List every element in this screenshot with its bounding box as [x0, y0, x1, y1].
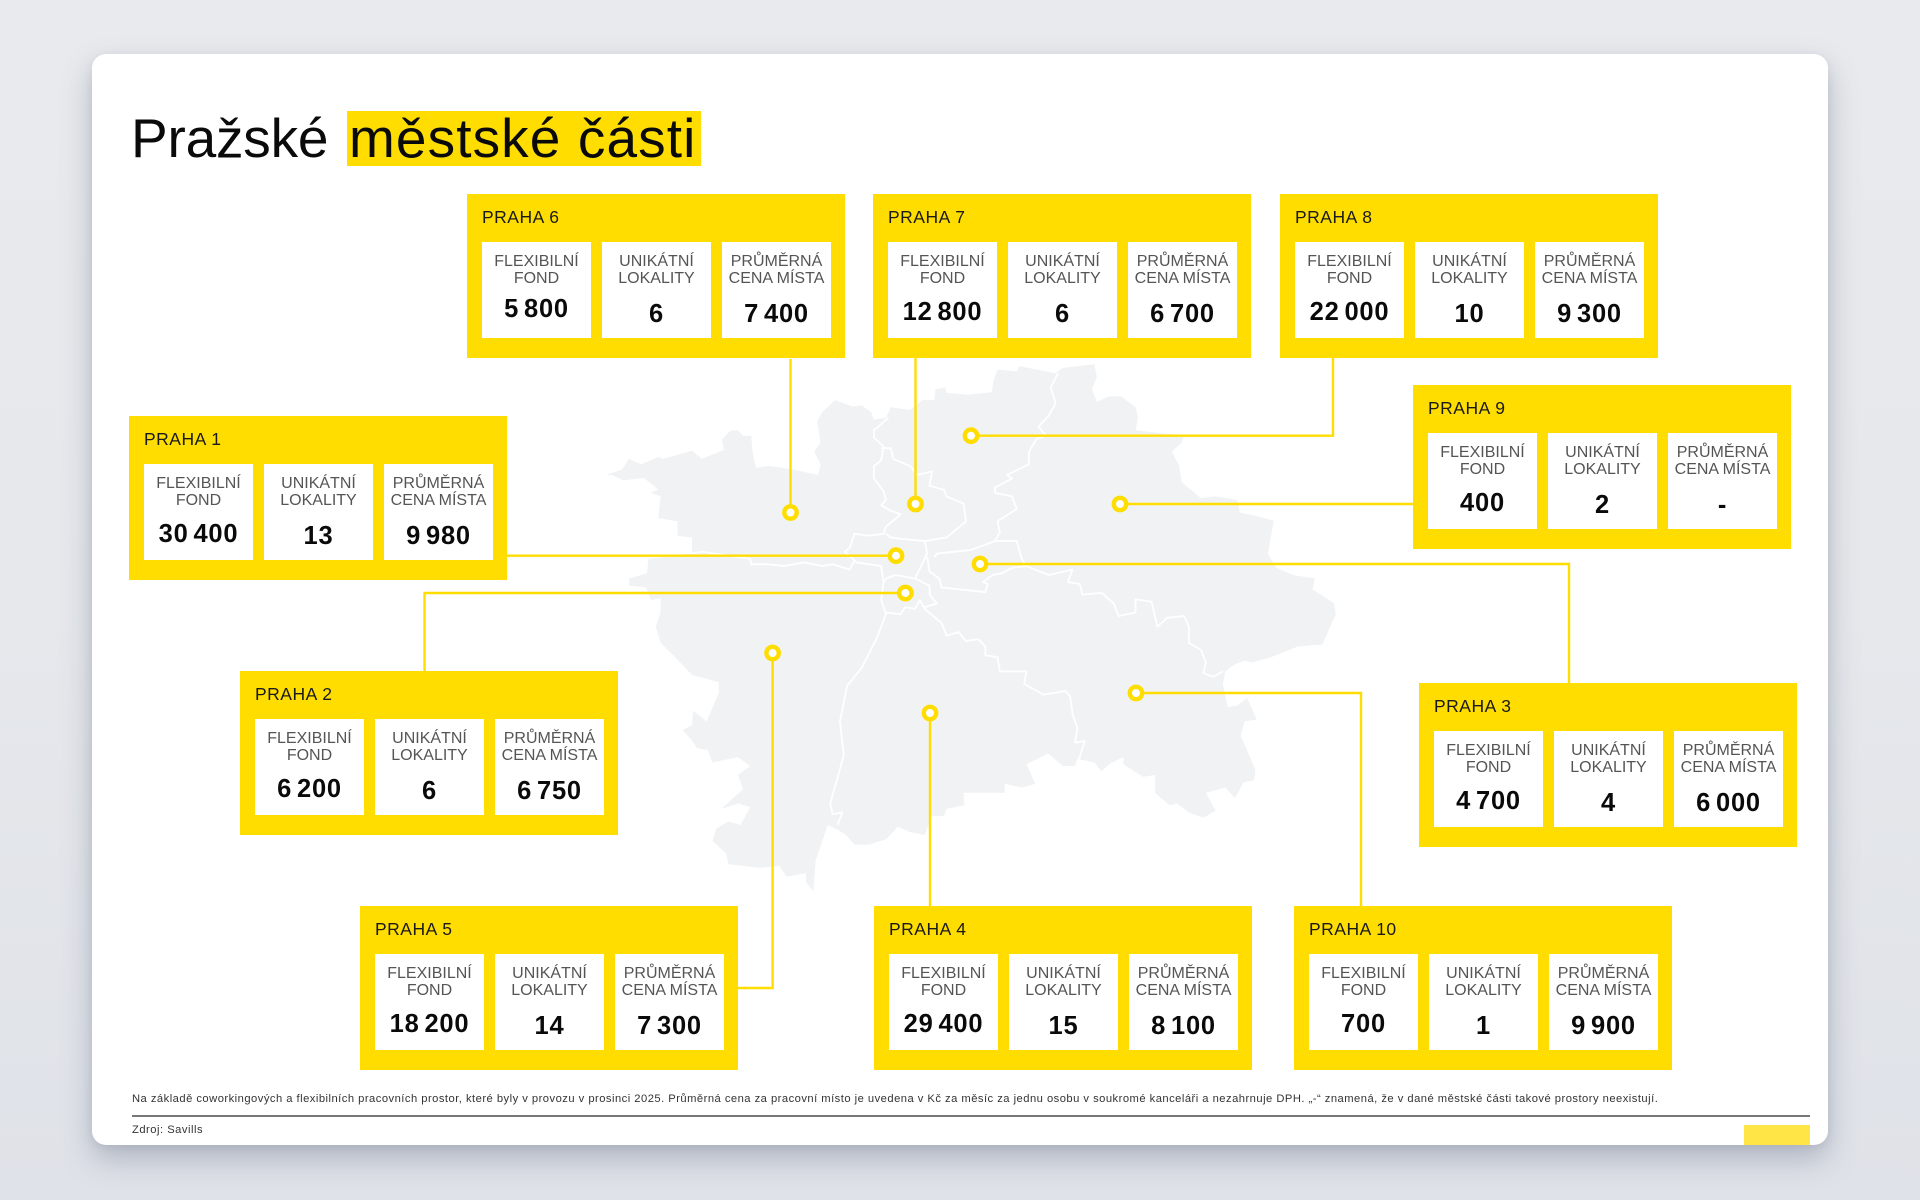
metric: flexibilní fond: 29 400 [904, 1010, 983, 1038]
heading: PRAHA 10 [1309, 919, 1397, 939]
metric: unikátní lokality [495, 954, 604, 1050]
metric: průměrná cena místa: CENA MÍSTA [1681, 759, 1776, 776]
metric: průměrná cena místa: PRŮMĚRNÁ [1683, 742, 1774, 759]
metric: unikátní lokality [375, 719, 484, 815]
metric: flexibilní fond [144, 464, 253, 560]
metric: unikátní lokality: UNIKÁTNÍ [619, 253, 694, 270]
connector: Praha 3 [974, 558, 1569, 683]
metric: flexibilní fond: FLEXIBILNÍ [900, 253, 985, 270]
metric: unikátní lokality: UNIKÁTNÍ [1432, 253, 1507, 270]
metric: průměrná cena místa: 7 400 [744, 300, 809, 328]
metric: unikátní lokality: UNIKÁTNÍ [392, 730, 467, 747]
connector: Praha 8 [965, 357, 1333, 442]
metric: flexibilní fond: FLEXIBILNÍ [1440, 444, 1525, 461]
metric: flexibilní fond: 18 200 [390, 1010, 469, 1038]
metric: průměrná cena místa [615, 954, 724, 1050]
metric: průměrná cena místa [1549, 954, 1658, 1050]
connector: Praha 4 [924, 707, 936, 906]
source: Zdroj: Savills [132, 1124, 203, 1136]
metric: unikátní lokality: LOKALITY [511, 982, 588, 999]
panel: Praha 9 [1413, 385, 1791, 549]
panel: Praha 4 [874, 906, 1252, 1070]
metric: unikátní lokality: 10 [1455, 300, 1484, 328]
metric: flexibilní fond: FLEXIBILNÍ [1446, 742, 1531, 759]
metric: flexibilní fond: 30 400 [159, 520, 238, 548]
metric: flexibilní fond [255, 719, 364, 815]
metric: unikátní lokality [1554, 731, 1663, 827]
metric: průměrná cena místa: CENA MÍSTA [391, 492, 486, 509]
metric: průměrná cena místa: CENA MÍSTA [1675, 461, 1770, 478]
metric: unikátní lokality: UNIKÁTNÍ [512, 965, 587, 982]
metric: flexibilní fond: 22 000 [1310, 298, 1389, 326]
metric: flexibilní fond: FLEXIBILNÍ [901, 965, 986, 982]
connector: Praha 9 [1114, 498, 1413, 510]
metric: unikátní lokality: UNIKÁTNÍ [1565, 444, 1640, 461]
panel: Praha 10 [1294, 906, 1672, 1070]
metric: flexibilní fond: FOND [920, 270, 965, 287]
metric: flexibilní fond: FLEXIBILNÍ [387, 965, 472, 982]
metric: průměrná cena místa [722, 242, 831, 338]
metric: flexibilní fond [1428, 433, 1537, 529]
panel: Praha 8 [1280, 194, 1658, 358]
metric: unikátní lokality: LOKALITY [1570, 759, 1647, 776]
metric: unikátní lokality: 6 [649, 300, 664, 328]
metric: průměrná cena místa: 6 750 [517, 777, 582, 805]
metric: unikátní lokality [264, 464, 373, 560]
metric: unikátní lokality [1429, 954, 1538, 1050]
metric: flexibilní fond: 5 800 [504, 295, 569, 323]
metric: flexibilní fond: FOND [1460, 461, 1505, 478]
metric: průměrná cena místa: 9 980 [406, 522, 471, 550]
metric: unikátní lokality: LOKALITY [1564, 461, 1641, 478]
metric: průměrná cena místa: PRŮMĚRNÁ [1677, 444, 1768, 461]
metric: průměrná cena místa: PRŮMĚRNÁ [624, 965, 715, 982]
metric: unikátní lokality: UNIKÁTNÍ [281, 475, 356, 492]
heading: PRAHA 5 [375, 919, 452, 939]
metric: flexibilní fond: 12 800 [903, 298, 982, 326]
metric: unikátní lokality: UNIKÁTNÍ [1571, 742, 1646, 759]
metric: průměrná cena místa: CENA MÍSTA [729, 270, 824, 287]
panel: Praha 1 [129, 416, 507, 580]
metric: flexibilní fond: FOND [176, 492, 221, 509]
footnote: Na základě coworkingových a flexibilních pracovních prostor, které byly v provozu v prosinci 2025. Průměrná cena za pracovní místo je uvedena v Kč za měsíc za jednu osobu v soukromé kanceláři a nezahrnuje DPH. „-“ znamená, že v dané městské části takové prostory neexistují. [132, 1093, 1658, 1105]
metric: průměrná cena místa: 7 300 [637, 1012, 702, 1040]
corner accent [1744, 1125, 1810, 1145]
metric: průměrná cena místa [1674, 731, 1783, 827]
metric: flexibilní fond: FOND [514, 270, 559, 287]
metric: průměrná cena místa: CENA MÍSTA [1136, 982, 1231, 999]
metric: unikátní lokality: LOKALITY [391, 747, 468, 764]
connector: Praha 10 [1130, 687, 1361, 906]
metric: flexibilní fond [1434, 731, 1543, 827]
metric: unikátní lokality: 14 [535, 1012, 564, 1040]
metric: průměrná cena místa: PRŮMĚRNÁ [393, 475, 484, 492]
metric: průměrná cena místa: CENA MÍSTA [622, 982, 717, 999]
metric: flexibilní fond: FOND [1341, 982, 1386, 999]
metric: průměrná cena místa: - [1718, 491, 1727, 519]
metric: unikátní lokality: 6 [422, 777, 437, 805]
metric: unikátní lokality: LOKALITY [1431, 270, 1508, 287]
metric: flexibilní fond: 4 700 [1456, 787, 1521, 815]
metric: flexibilní fond: FOND [1327, 270, 1372, 287]
metric: unikátní lokality: LOKALITY [280, 492, 357, 509]
metric: flexibilní fond: FOND [1466, 759, 1511, 776]
metric: flexibilní fond: 6 200 [277, 775, 342, 803]
panel: Praha 3 [1419, 683, 1797, 847]
metric: průměrná cena místa: PRŮMĚRNÁ [1137, 253, 1228, 270]
metric: unikátní lokality: 1 [1476, 1012, 1491, 1040]
metric: flexibilní fond: FOND [407, 982, 452, 999]
panel: Praha 2 [240, 671, 618, 835]
metric: flexibilní fond: FOND [287, 747, 332, 764]
metric: unikátní lokality: LOKALITY [1025, 982, 1102, 999]
metric: průměrná cena místa: PRŮMĚRNÁ [1138, 965, 1229, 982]
connector: Praha 6 [784, 359, 797, 519]
panel: Praha 5 [360, 906, 738, 1070]
connector: Praha 7 [909, 357, 922, 510]
metric: flexibilní fond: FOND [921, 982, 966, 999]
metric: průměrná cena místa [1535, 242, 1644, 338]
metric: unikátní lokality: LOKALITY [618, 270, 695, 287]
metric: průměrná cena místa: 8 100 [1151, 1012, 1216, 1040]
metric: průměrná cena místa: 9 900 [1571, 1012, 1636, 1040]
metric: flexibilní fond: 400 [1460, 489, 1505, 517]
metric: průměrná cena místa [384, 464, 493, 560]
metric: průměrná cena místa: 9 300 [1557, 300, 1622, 328]
heading: PRAHA 6 [482, 207, 559, 227]
metric: unikátní lokality: 6 [1055, 300, 1070, 328]
metric: flexibilní fond: FLEXIBILNÍ [1307, 253, 1392, 270]
metric: průměrná cena místa [495, 719, 604, 815]
heading: PRAHA 7 [888, 207, 965, 227]
heading: PRAHA 8 [1295, 207, 1372, 227]
panel: Praha 6 [467, 194, 845, 358]
metric: flexibilní fond [1309, 954, 1418, 1050]
connector: Praha 2 [424, 587, 912, 671]
metric: průměrná cena místa: PRŮMĚRNÁ [1544, 253, 1635, 270]
metric: unikátní lokality: UNIKÁTNÍ [1025, 253, 1100, 270]
heading: PRAHA 1 [144, 429, 221, 449]
metric: flexibilní fond: FLEXIBILNÍ [156, 475, 241, 492]
heading: PRAHA 9 [1428, 398, 1505, 418]
metric: unikátní lokality: UNIKÁTNÍ [1026, 965, 1101, 982]
metric: unikátní lokality [602, 242, 711, 338]
metric: průměrná cena místa: 6 700 [1150, 300, 1215, 328]
metric: unikátní lokality [1415, 242, 1524, 338]
heading: PRAHA 3 [1434, 696, 1511, 716]
metric: unikátní lokality [1009, 954, 1118, 1050]
metric: průměrná cena místa: PRŮMĚRNÁ [731, 253, 822, 270]
heading: PRAHA 4 [889, 919, 966, 939]
metric: průměrná cena místa: CENA MÍSTA [502, 747, 597, 764]
metric: průměrná cena místa [1128, 242, 1237, 338]
metric: průměrná cena místa: CENA MÍSTA [1135, 270, 1230, 287]
metric: flexibilní fond: FLEXIBILNÍ [267, 730, 352, 747]
panel: Praha 7 [873, 194, 1251, 358]
metric: unikátní lokality: UNIKÁTNÍ [1446, 965, 1521, 982]
metric: unikátní lokality: LOKALITY [1445, 982, 1522, 999]
metric: průměrná cena místa: PRŮMĚRNÁ [1558, 965, 1649, 982]
metric: unikátní lokality: 15 [1049, 1012, 1078, 1040]
heading: PRAHA 2 [255, 684, 332, 704]
metric: flexibilní fond [1295, 242, 1404, 338]
metric: flexibilní fond: FLEXIBILNÍ [494, 253, 579, 270]
metric: unikátní lokality [1548, 433, 1657, 529]
metric: průměrná cena místa: 6 000 [1696, 789, 1761, 817]
metric: unikátní lokality [1008, 242, 1117, 338]
metric: průměrná cena místa: CENA MÍSTA [1542, 270, 1637, 287]
metric: flexibilní fond [889, 954, 998, 1050]
metric: průměrná cena místa [1668, 433, 1777, 529]
metric: průměrná cena místa [1129, 954, 1238, 1050]
title: Pražské [131, 107, 328, 169]
metric: flexibilní fond [375, 954, 484, 1050]
title highlight: městské části [349, 107, 696, 169]
metric: flexibilní fond [482, 242, 591, 338]
connector: Praha 1 [507, 550, 902, 562]
metric: flexibilní fond [888, 242, 997, 338]
metric: unikátní lokality: LOKALITY [1024, 270, 1101, 287]
metric: unikátní lokality: 2 [1595, 491, 1610, 519]
map: Prague districts [606, 364, 1336, 891]
metric: unikátní lokality: 13 [304, 522, 333, 550]
connector: Praha 5 [738, 647, 779, 988]
metric: unikátní lokality: 4 [1601, 789, 1616, 817]
metric: průměrná cena místa: CENA MÍSTA [1556, 982, 1651, 999]
metric: průměrná cena místa: PRŮMĚRNÁ [504, 730, 595, 747]
metric: flexibilní fond: 700 [1341, 1010, 1386, 1038]
metric: flexibilní fond: FLEXIBILNÍ [1321, 965, 1406, 982]
